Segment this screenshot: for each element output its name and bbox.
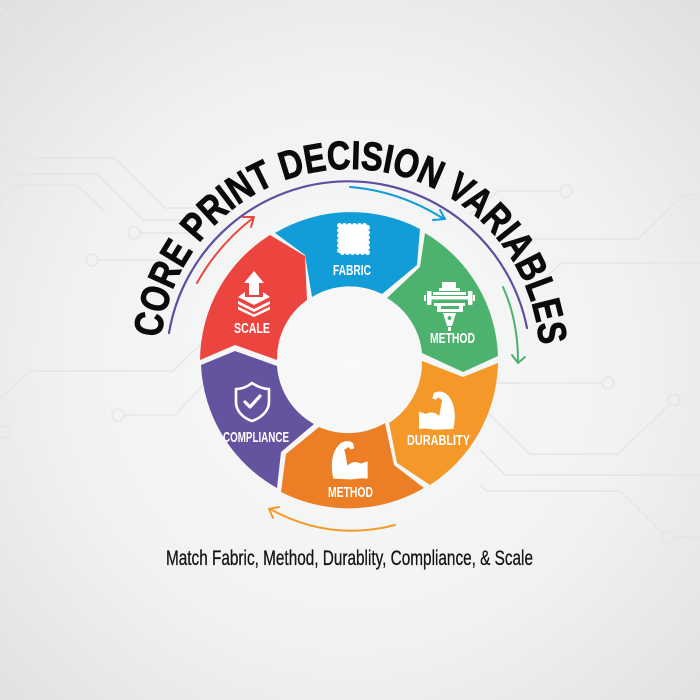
label: durablity: DURABLITY	[407, 432, 470, 449]
arrow: orange	[269, 507, 395, 531]
label: method: METHOD	[430, 330, 475, 347]
segment: fabric	[275, 212, 420, 297]
icon: flexed arm	[419, 392, 455, 430]
icon: shield check	[236, 383, 269, 421]
label: method: METHOD	[328, 484, 373, 501]
icon: fabric swatch	[340, 226, 368, 252]
segment: method orange	[281, 423, 424, 508]
arrow: green	[503, 287, 525, 363]
arrow: red	[197, 217, 254, 283]
segment: method green	[387, 233, 498, 372]
title: CORE PRINT DECISION VARIABLES	[134, 140, 567, 344]
arrow: blue	[350, 187, 445, 220]
segment: durablity	[389, 361, 498, 485]
purple outer arc	[169, 181, 527, 333]
circuit pattern background	[0, 8, 700, 543]
segment: compliance	[201, 351, 314, 488]
segment: scale	[200, 235, 307, 360]
icon: arrow over layers	[238, 271, 270, 317]
icon: flexed arm	[332, 441, 368, 479]
icon: print head	[424, 282, 475, 331]
label: compliance: COMPLIANCE	[223, 429, 289, 446]
label: scale: SCALE	[234, 320, 270, 337]
donut chart	[200, 212, 498, 508]
subtitle: Match Fabric, Method, Durablity, Compliance, & Scale	[166, 547, 533, 570]
label: fabric: FABRIC	[333, 262, 371, 279]
